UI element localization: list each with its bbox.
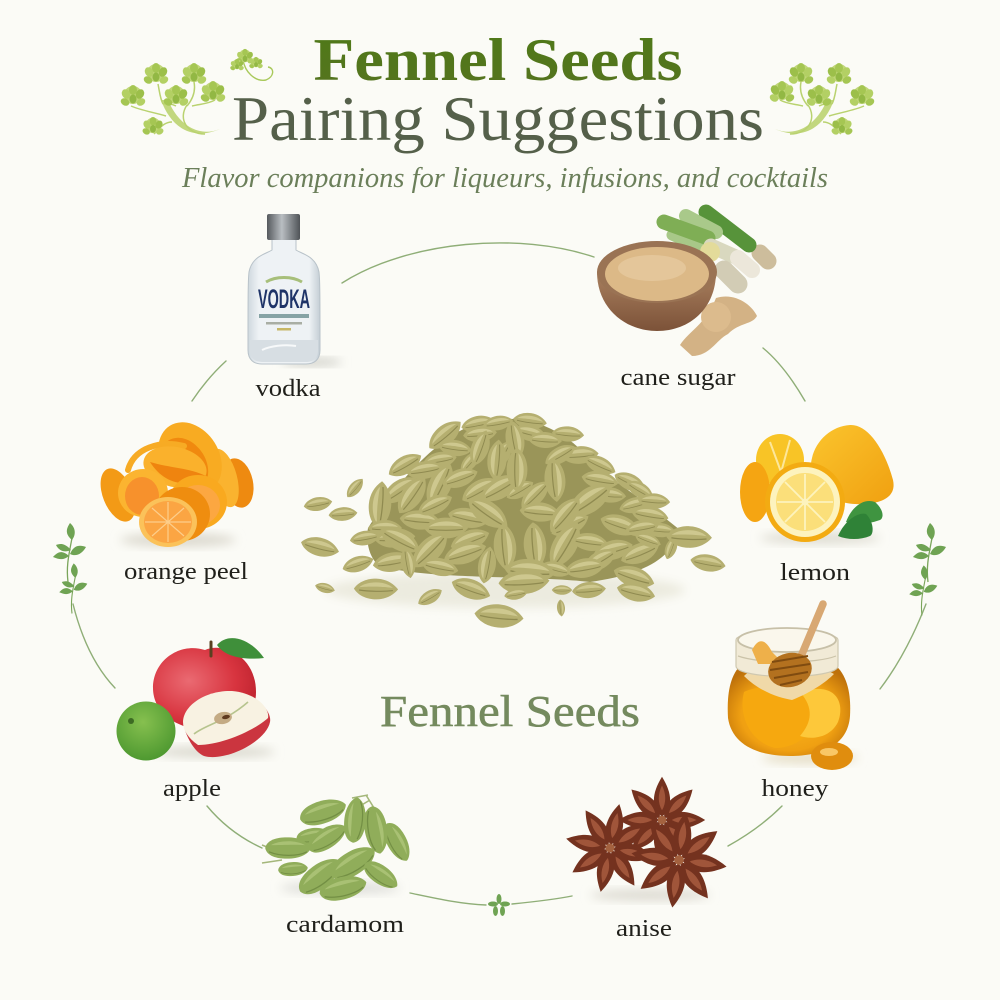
lemon <box>740 425 894 544</box>
icon: fennel sprig top left <box>119 63 227 136</box>
icon: fennel sprig top right <box>768 63 876 136</box>
icon: small fennel sprig <box>229 49 273 80</box>
ring connector arcs <box>73 243 926 905</box>
center label: Fennel Seeds <box>380 687 640 736</box>
half apple <box>183 691 270 757</box>
label: cane sugar: cane sugar <box>620 365 736 391</box>
vodka bottle <box>248 214 342 366</box>
sugar spill <box>680 296 757 356</box>
label: vodka: vodka <box>256 376 321 402</box>
title: Pairing Suggestions <box>232 83 764 154</box>
honey drop <box>811 742 853 770</box>
jar body <box>728 664 850 756</box>
fennel seed pile <box>299 411 727 630</box>
honey jar <box>728 604 858 770</box>
title <box>232 27 764 154</box>
label: lemon: lemon <box>780 560 850 586</box>
title: Fennel Seeds <box>314 27 682 93</box>
pile base <box>367 419 680 582</box>
apple leaf <box>217 638 264 659</box>
bottle body <box>248 238 320 364</box>
wooden bowl <box>597 272 716 331</box>
bottle label: VODKA <box>258 284 310 314</box>
apple <box>116 638 275 760</box>
seeds back rows <box>460 413 496 435</box>
cane stalks <box>664 212 768 284</box>
label: apple: apple <box>163 776 221 802</box>
loose seeds <box>303 495 333 513</box>
cardamom <box>262 794 416 905</box>
label: anise: anise <box>616 916 672 942</box>
subtitle: Flavor companions for liqueurs, infusions, and cocktails <box>181 163 828 194</box>
apple stem <box>210 642 212 656</box>
jar neck <box>736 631 838 676</box>
label: honey: honey <box>762 776 828 802</box>
honey dipper <box>802 604 823 654</box>
lemon leaves <box>846 501 883 524</box>
icon: right sprigs <box>909 523 946 616</box>
cane sugar <box>597 212 768 356</box>
icon: small flower on bottom arc <box>488 894 510 916</box>
label: orange peel: orange peel <box>124 559 248 585</box>
icon: left sprigs <box>53 523 87 614</box>
orange peel <box>94 410 258 547</box>
star anise <box>557 777 733 914</box>
bottle cap <box>267 214 300 240</box>
label: cardamom: cardamom <box>286 912 404 938</box>
